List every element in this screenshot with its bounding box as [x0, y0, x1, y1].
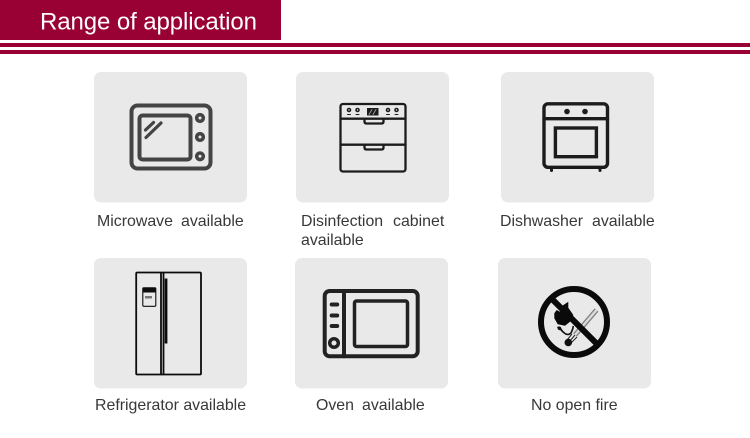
label: oven: Oven [316, 397, 354, 414]
icon: microwave [132, 106, 210, 168]
header banner [0, 0, 281, 40]
label: microwave: available [181, 213, 244, 230]
icon part: match tip [564, 339, 572, 346]
icon part: flame [554, 302, 573, 326]
panel: microwave [94, 72, 247, 202]
icon: oven [325, 291, 418, 356]
label: no open fire: No open fire [531, 397, 618, 414]
label: oven: available [362, 397, 425, 414]
label: refrigerator: Refrigerator available [95, 397, 246, 414]
label: disinfection cabinet: available [301, 232, 364, 249]
icon part: flame outline [558, 326, 573, 334]
label: dishwasher: Dishwasher [500, 213, 584, 230]
icon part: match stick [575, 310, 596, 335]
panel: oven [295, 258, 448, 388]
label: microwave: Microwave [97, 213, 173, 230]
icon part: prohibition sign [541, 289, 607, 355]
panel: no open fire [498, 258, 651, 388]
panel: refrigerator [94, 258, 247, 388]
icon: refrigerator [136, 272, 201, 374]
icon: dishwasher [544, 104, 608, 170]
label: disinfection cabinet [301, 213, 445, 249]
panel: disinfection cabinet [296, 72, 449, 202]
header double rule [0, 43, 750, 54]
label: dishwasher: available [592, 213, 655, 230]
label: disinfection cabinet: cabinet [393, 213, 445, 230]
icon: no open fire [541, 289, 607, 355]
icon part: match head stems [567, 334, 577, 343]
panel: dishwasher [501, 72, 654, 202]
icon: disinfection cabinet [340, 104, 406, 172]
header banner: Range of application [40, 8, 257, 36]
label: disinfection cabinet: Disinfection [301, 213, 383, 230]
